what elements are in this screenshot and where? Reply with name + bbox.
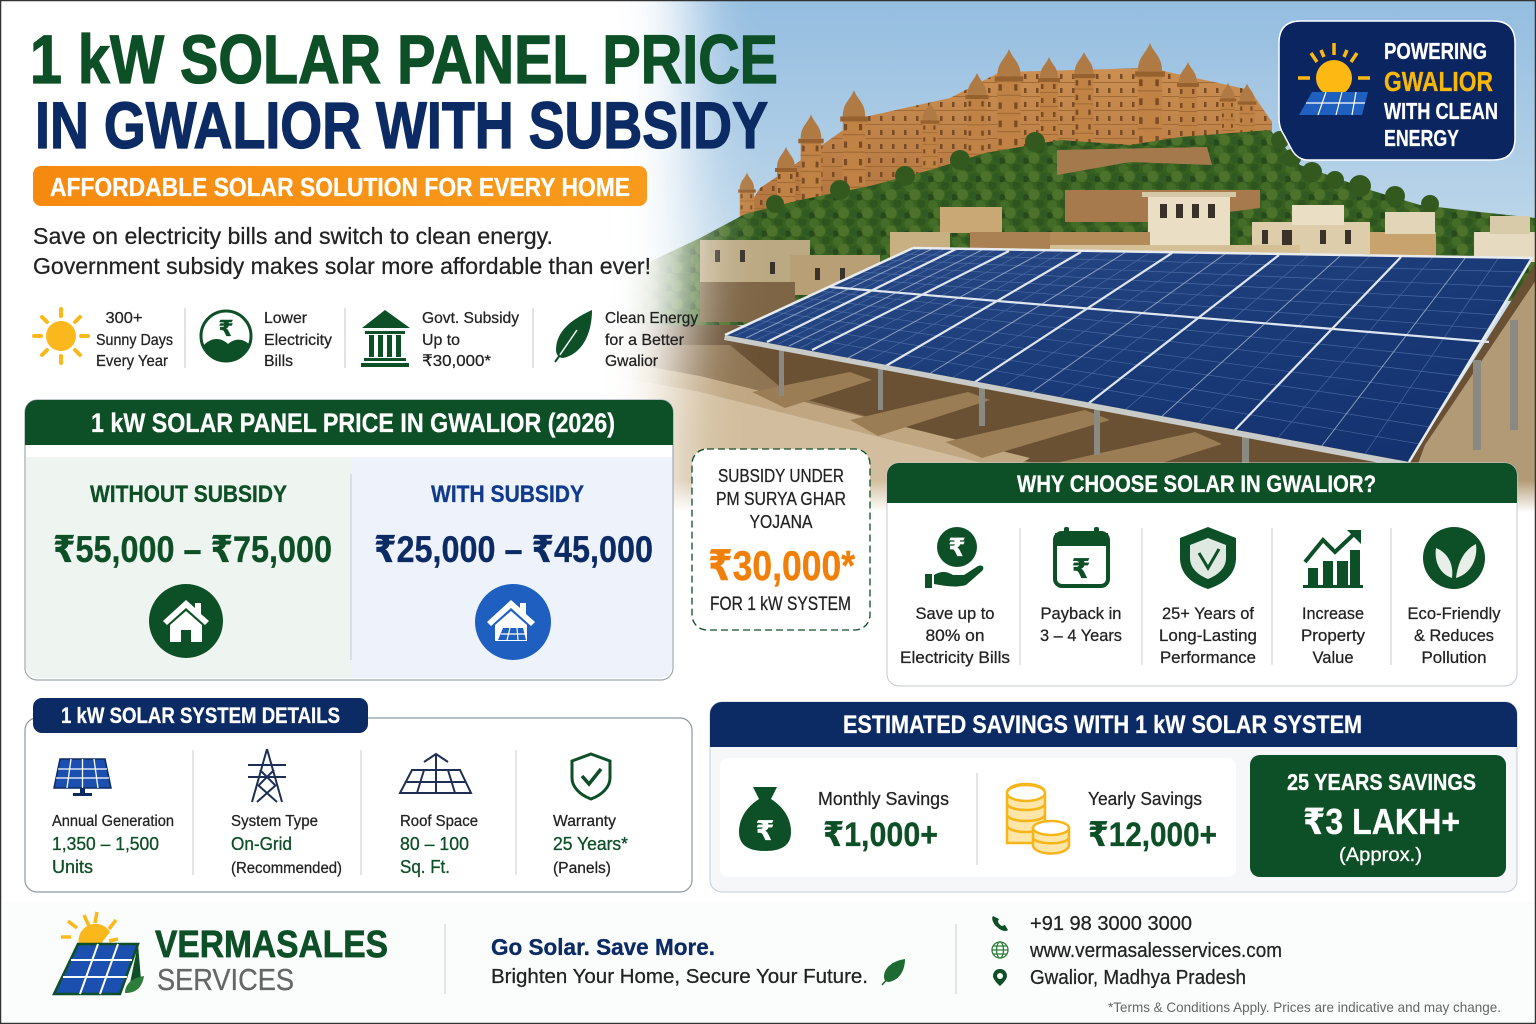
reason: payback <box>1040 527 1122 645</box>
yearly savings <box>1007 784 1217 854</box>
icon: small leaf <box>882 959 905 985</box>
25 years savings box: 25 YEARS SAVINGS <box>1287 769 1476 795</box>
benefit: lower bills <box>264 310 332 370</box>
column: without subsidy: WITHOUT SUBSIDY <box>90 481 287 508</box>
fort <box>738 43 1272 275</box>
monthly savings: ₹1,000+ <box>823 816 938 854</box>
panel: price card <box>25 400 673 680</box>
rooftop <box>590 262 1536 512</box>
logo <box>54 912 388 997</box>
benefit: subsidy: Up to <box>422 332 460 349</box>
callout: subsidy under PM Surya Ghar: ₹30,000* <box>708 542 856 589</box>
column: with subsidy: WITH SUBSIDY <box>431 481 584 508</box>
bottom fade of photo <box>560 480 1536 512</box>
price card header: 1 kW SOLAR PANEL PRICE IN GWALIOR (2026) <box>91 408 615 438</box>
wall <box>590 362 1040 512</box>
intro paragraph <box>33 223 651 279</box>
benefit: subsidy: Govt. Subsidy <box>422 310 519 327</box>
detail: annual generation: 1,350 – 1,500 <box>52 833 159 854</box>
detail: warranty: (Panels) <box>553 860 611 877</box>
terms note: *Terms & Conditions Apply. Prices are indicative and may change. <box>1108 999 1501 1015</box>
detail: warranty <box>553 754 628 877</box>
reason: save on bills: Save up to <box>916 604 994 623</box>
reason: property value: Increase <box>1302 604 1364 623</box>
detail: warranty: 25 Years* <box>553 833 628 854</box>
subtitle banner <box>33 166 647 206</box>
benefit: clean energy: Gwalior <box>605 353 659 370</box>
icon: calendar rupee: ₹ <box>1072 554 1090 584</box>
monthly savings: Monthly Savings <box>818 788 949 809</box>
intro paragraph: Save on electricity bills and switch to clean energy. <box>33 223 553 249</box>
benefit: lower bills: Lower <box>264 310 308 327</box>
detail: system type: System Type <box>231 813 318 830</box>
tagline <box>491 934 905 988</box>
benefit: sunny days: Every Year <box>96 353 169 370</box>
icon: globe <box>992 942 1008 958</box>
icon: shield with leaf <box>1180 527 1236 589</box>
price card header <box>25 400 673 445</box>
reason: save on bills: 80% on <box>926 626 984 645</box>
badge: powering Gwalior: WITH CLEAN <box>1384 98 1498 124</box>
beams <box>752 372 872 408</box>
contact details: +91 98 3000 3000 <box>1030 913 1192 935</box>
icon: solar panel <box>54 759 111 796</box>
reason: payback: Payback in <box>1040 604 1122 623</box>
why choose header <box>887 463 1517 503</box>
reason: payback: 3 – 4 Years <box>1040 626 1122 645</box>
detail: annual generation: Units <box>52 856 93 877</box>
panel: system details <box>25 698 692 892</box>
reason: save on bills: Electricity Bills <box>900 648 1010 667</box>
savings header: ESTIMATED SAVINGS WITH 1 kW SOLAR SYSTEM <box>843 711 1362 739</box>
title: IN GWALIOR WITH SUBSIDY <box>35 88 768 162</box>
column: with subsidy: ₹25,000 – ₹45,000 <box>374 529 653 570</box>
icon: rupee over hills <box>201 311 251 361</box>
title <box>30 21 778 162</box>
contact details: www.vermasalesservices.com <box>1029 940 1282 962</box>
reason: property value: Property <box>1301 626 1365 645</box>
icon: rising chart <box>1303 530 1363 588</box>
contact details: Gwalior, Madhya Pradesh <box>1030 967 1246 989</box>
white fade over left of photo <box>0 0 690 800</box>
badge: powering Gwalior: POWERING <box>1384 38 1487 64</box>
benefit: lower bills: Electricity <box>264 332 332 349</box>
icon: government building <box>361 310 410 367</box>
reason: eco-friendly: Eco-Friendly <box>1408 604 1501 623</box>
detail: warranty: Warranty <box>553 813 616 830</box>
icon: shield check <box>572 754 610 799</box>
panel: why choose solar <box>887 463 1517 686</box>
icon: house with solar <box>475 584 551 660</box>
benefit: clean energy: Clean Energy <box>605 310 698 327</box>
supports <box>779 320 1518 464</box>
icon: house <box>149 584 223 658</box>
detail: roof space: Roof Space <box>400 813 478 830</box>
callout: subsidy under PM Surya Ghar: YOJANA <box>750 512 812 532</box>
icon: leaves in circle <box>1423 527 1485 589</box>
panel: estimated savings <box>710 702 1517 892</box>
icon: sun over panel <box>1298 43 1370 115</box>
icon: coin stacks <box>1007 784 1069 854</box>
icon: hand with rupee coin: ₹ <box>948 534 966 562</box>
logo: VERMASALES <box>155 924 388 966</box>
yearly savings: ₹12,000+ <box>1088 816 1217 854</box>
benefits row <box>34 308 698 370</box>
tagline: Brighten Your Home, Secure Your Future. <box>491 965 868 988</box>
benefit: lower bills: Bills <box>264 353 293 370</box>
icon: logo sun and panel <box>54 912 144 994</box>
reason: property value <box>1301 530 1365 667</box>
25 years savings box: (Approx.) <box>1339 845 1422 866</box>
detail: system type <box>231 749 342 877</box>
icon: roof grid <box>400 754 471 793</box>
callout: subsidy under PM Surya Ghar: FOR 1 kW SYSTEM <box>710 594 851 615</box>
details heading tab <box>33 698 368 733</box>
reason: eco-friendly: & Reduces <box>1414 626 1494 645</box>
badge: powering Gwalior: ENERGY <box>1384 125 1459 151</box>
benefit: subsidy: ₹30,000* <box>422 353 491 370</box>
tagline: Go Solar. Save More. <box>491 934 715 960</box>
hero photo: fort and rooftop solar array <box>560 0 1536 512</box>
why choose header: WHY CHOOSE SOLAR IN GWALIOR? <box>1017 471 1376 498</box>
reason: long lasting: Performance <box>1160 648 1256 667</box>
yearly savings: Yearly Savings <box>1088 788 1202 809</box>
icon: money bag: ₹ <box>756 816 774 846</box>
buildings <box>700 192 1536 322</box>
column: with subsidy <box>351 457 672 678</box>
title: 1 kW SOLAR PANEL PRICE <box>30 21 778 98</box>
callout: subsidy under PM Surya Ghar: SUBSIDY UNDER <box>718 466 844 486</box>
column: without subsidy <box>26 457 351 678</box>
intro paragraph: Government subsidy makes solar more affordable than ever! <box>33 253 651 279</box>
badge: powering Gwalior <box>1279 21 1515 160</box>
icon: leaf <box>555 310 592 362</box>
reason: property value: Value <box>1312 648 1354 667</box>
footer <box>2 902 1534 1022</box>
reason: long lasting <box>1159 527 1257 667</box>
benefit: sunny days: Sunny Days <box>96 332 173 349</box>
benefit: clean energy <box>605 310 698 370</box>
column: without subsidy: ₹55,000 – ₹75,000 <box>53 529 332 570</box>
detail: roof space <box>400 754 478 877</box>
reason: eco-friendly <box>1408 527 1501 667</box>
reason: eco-friendly: Pollution <box>1422 648 1486 667</box>
reason: long lasting: Long-Lasting <box>1159 626 1257 645</box>
savings header <box>710 702 1517 747</box>
icon: money bag <box>739 787 791 851</box>
detail: system type: On-Grid <box>231 833 292 854</box>
benefit: subsidy <box>422 310 519 370</box>
logo: SERVICES <box>157 962 294 997</box>
hill <box>590 130 1536 330</box>
reason: save on bills <box>900 527 1010 667</box>
callout: subsidy under PM Surya Ghar <box>692 449 870 630</box>
25 years savings box: ₹3 LAKH+ <box>1303 801 1460 842</box>
benefit: sunny days <box>96 310 173 370</box>
contact details <box>992 913 1282 989</box>
subtitle banner: AFFORDABLE SOLAR SOLUTION FOR EVERY HOME <box>50 172 630 202</box>
badge: powering Gwalior: GWALIOR <box>1384 66 1493 97</box>
icon: phone <box>992 916 1008 931</box>
benefit: sunny days: 300+ <box>106 310 142 327</box>
callout: subsidy under PM Surya Ghar: PM SURYA GHAR <box>716 489 846 509</box>
detail: annual generation <box>52 759 174 877</box>
icon: sun <box>34 309 88 363</box>
detail: roof space: 80 – 100 <box>400 833 469 854</box>
reason: long lasting: 25+ Years of <box>1162 604 1254 623</box>
icon: map pin <box>993 969 1007 986</box>
detail: annual generation: Annual Generation <box>52 813 174 830</box>
details heading tab: 1 kW SOLAR SYSTEM DETAILS <box>61 703 340 728</box>
icon: transmission tower <box>248 749 286 802</box>
solar panel array <box>724 248 1532 468</box>
monthly savings <box>739 787 949 854</box>
25 years savings box <box>1250 755 1506 877</box>
detail: system type: (Recommended) <box>231 860 342 877</box>
icon: rupee over hills: ₹ <box>218 316 234 341</box>
detail: roof space: Sq. Ft. <box>400 856 450 877</box>
benefit: clean energy: for a Better <box>605 332 685 349</box>
